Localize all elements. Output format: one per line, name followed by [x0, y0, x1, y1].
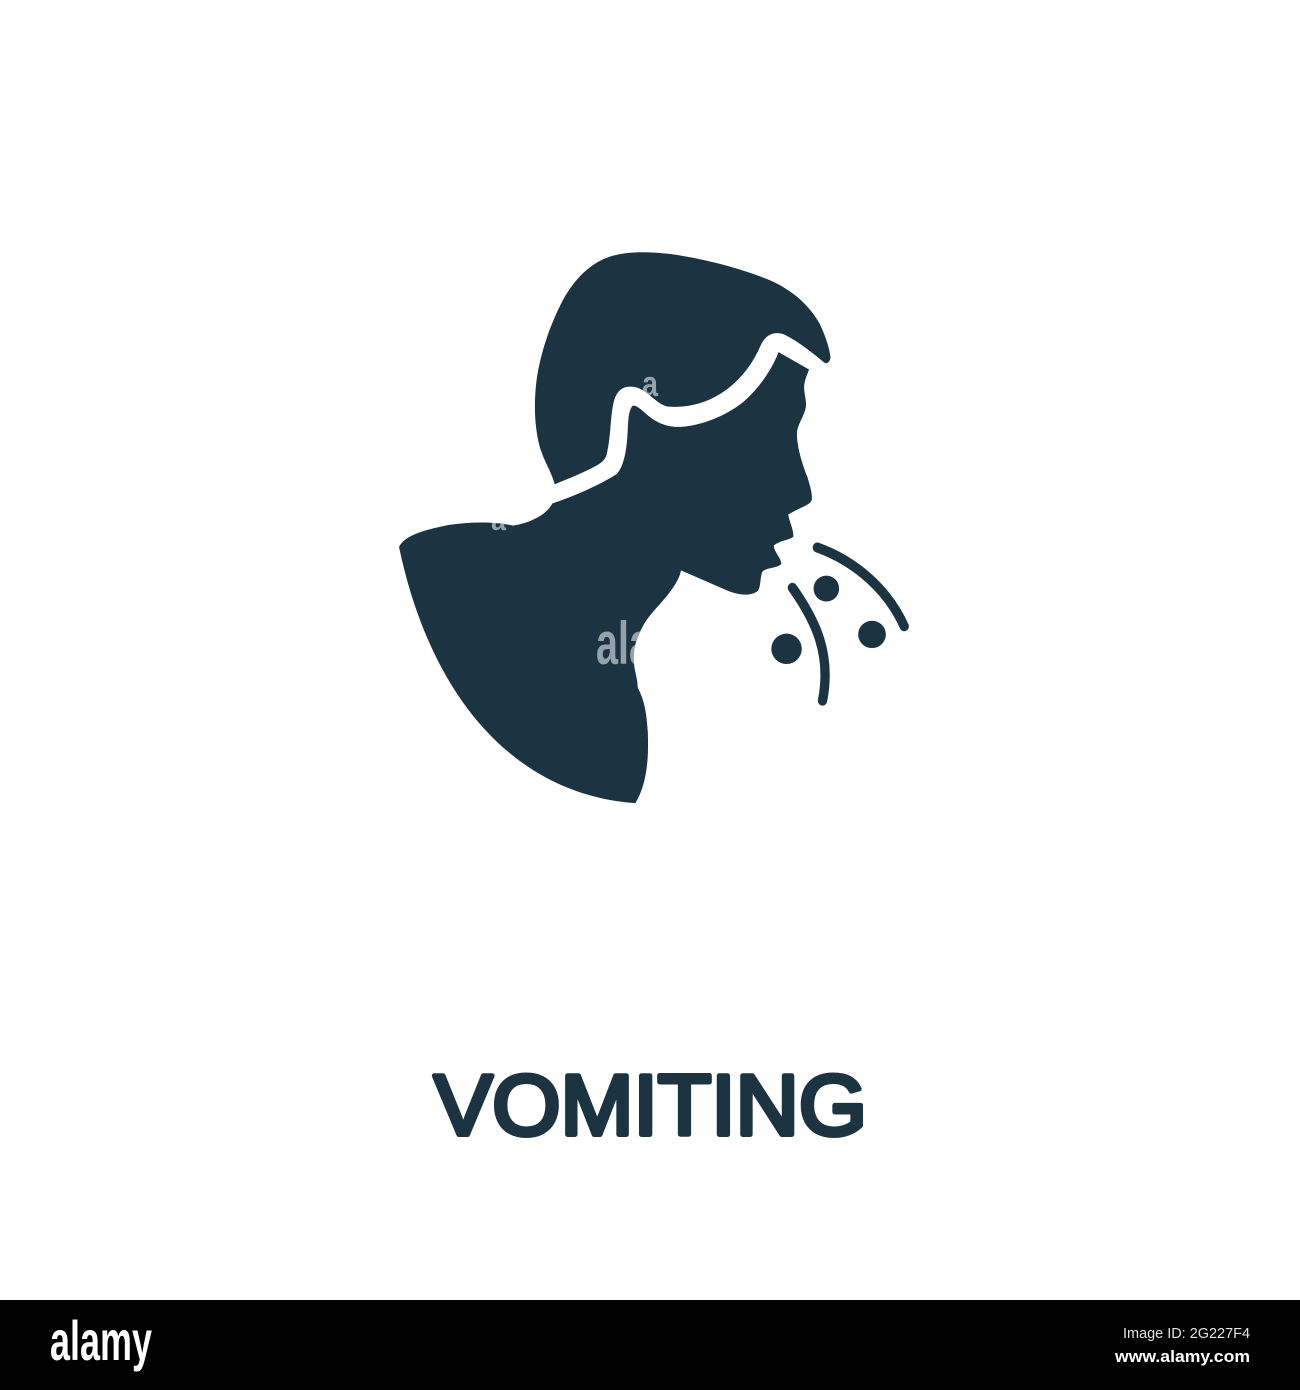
footer bar — [0, 1300, 1300, 1390]
watermark: alamy fragments over the silhouette — [492, 376, 658, 664]
watermark: alamy fragments over the silhouette: alamy — [596, 610, 708, 677]
footer image id: Image ID: 2G227F4 — [1123, 1325, 1250, 1342]
title: VOMITING — [434, 1058, 867, 1154]
footer website: www.alamy.com — [1114, 1347, 1250, 1366]
icon part: vomit droplets and arcs — [771, 547, 904, 701]
icon part: hair — [535, 252, 830, 484]
watermark: alamy fragments over the silhouette: a — [642, 363, 659, 404]
icon: person vomiting — [399, 252, 904, 803]
watermark: alamy fragments over the silhouette: a — [491, 504, 506, 537]
icon part: face and shoulders — [399, 352, 812, 803]
footer logo: alamy — [50, 1309, 152, 1372]
